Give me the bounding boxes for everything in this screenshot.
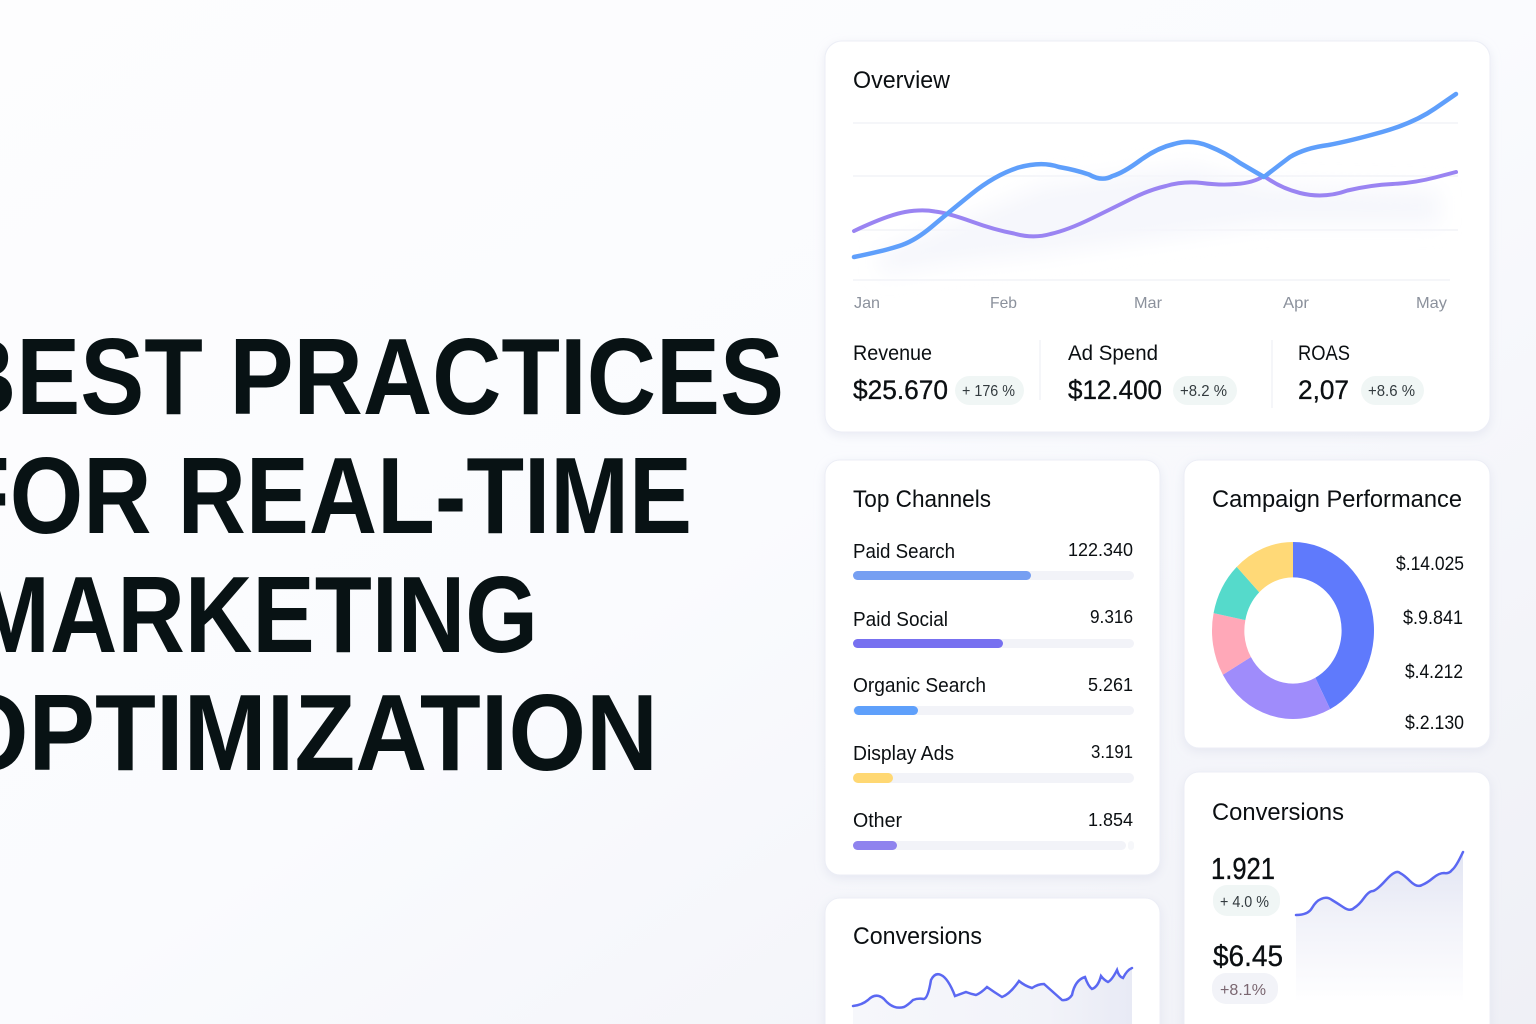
metric: roas: 2,07 (1298, 375, 1349, 405)
donut values: $.9.841 (1403, 608, 1463, 629)
axis labels: Apr (1283, 295, 1310, 312)
axis labels: Mar (1134, 295, 1163, 312)
axis labels (854, 295, 1447, 312)
row: paid social: Paid Social (853, 609, 948, 631)
sparkline: conversions bottom (853, 968, 1132, 1024)
panel: conversions bottom (825, 898, 1160, 1024)
row: paid search: 122.340 (1068, 539, 1133, 560)
metric: conversions count: + 4.0 % (1220, 894, 1269, 911)
donut values: $.4.212 (1405, 662, 1463, 683)
metric: ad spend: Ad Spend (1068, 342, 1158, 365)
metric: revenue: + 176 % (962, 383, 1015, 400)
metric: cost per conversion (1212, 940, 1283, 1004)
metric: revenue: $25.670 (853, 375, 948, 405)
metric: cost per conversion: +8.1% (1220, 982, 1266, 999)
donut chart (1212, 542, 1374, 719)
panel: overview (825, 41, 1490, 432)
metric: roas: ROAS (1298, 342, 1350, 365)
panel: conversions right (1184, 772, 1490, 1024)
metric: revenue: Revenue (853, 342, 932, 365)
metric: ad spend: $12.400 (1068, 375, 1162, 405)
row: organic search: Organic Search (853, 675, 986, 697)
heading: campaign performance: Campaign Performance (1212, 486, 1462, 513)
axis labels: May (1416, 295, 1447, 312)
row: other: 1.854 (1088, 809, 1133, 830)
panel: top channels (825, 460, 1160, 875)
panel: campaign performance (1184, 460, 1490, 748)
donut values: $.2.130 (1405, 713, 1464, 734)
axis labels: Feb (990, 295, 1017, 312)
sparkline: conversions right (1296, 852, 1463, 1000)
donut values: $.14.025 (1396, 554, 1464, 575)
heading: conversions bottom: Conversions (853, 923, 982, 950)
row: other: Other (853, 810, 902, 832)
row: organic search: 5.261 (1088, 674, 1133, 695)
row: display ads (853, 741, 1134, 783)
metric: cost per conversion: $6.45 (1213, 940, 1283, 973)
metric: roas: +8.6 % (1368, 383, 1415, 400)
heading: overview: Overview (853, 67, 951, 94)
donut values (1396, 554, 1464, 734)
series: purple line (854, 172, 1456, 236)
metric: ad spend (1068, 342, 1237, 405)
row: display ads: 3.191 (1091, 741, 1133, 762)
series: blue line (854, 94, 1456, 257)
metric: conversions count (1211, 851, 1280, 916)
metric: conversions count: 1.921 (1211, 851, 1275, 886)
metric: ad spend: +8.2 % (1180, 383, 1227, 400)
metric: revenue (853, 342, 1024, 405)
row: paid social: 9.316 (1090, 606, 1133, 627)
metric: roas (1298, 342, 1424, 405)
heading: top channels: Top Channels (853, 486, 991, 513)
row: paid social (853, 606, 1134, 648)
row: display ads: Display Ads (853, 743, 954, 765)
title (0, 316, 784, 794)
heading: conversions: Conversions (1212, 799, 1344, 826)
row: paid search (853, 539, 1134, 580)
row: other (853, 809, 1134, 850)
line chart (853, 94, 1458, 280)
axis labels: Jan (854, 295, 880, 312)
row: paid search: Paid Search (853, 541, 955, 563)
row: organic search (853, 674, 1134, 715)
